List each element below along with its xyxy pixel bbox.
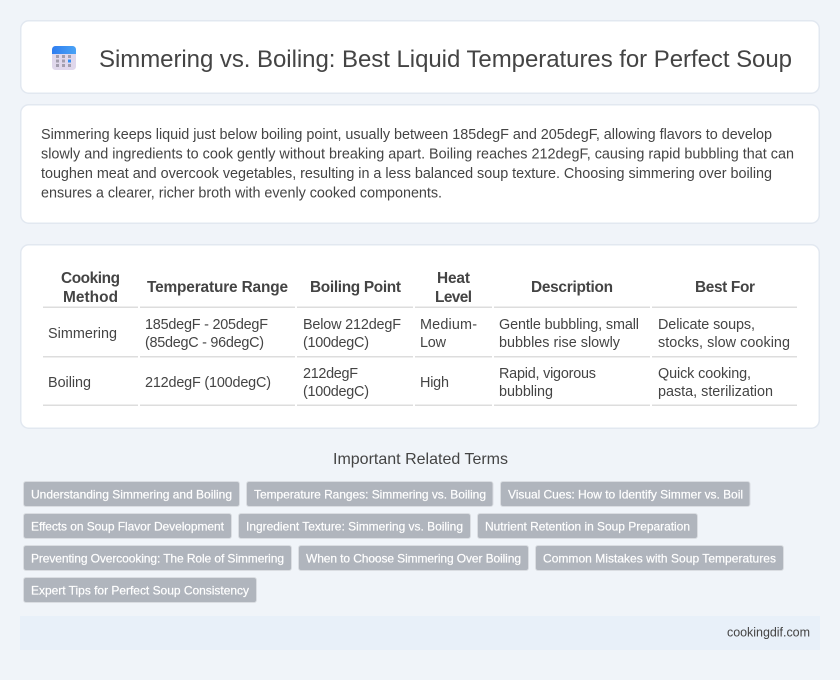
tag: Preventing Overcooking: The Role of Simmering xyxy=(31,551,284,565)
tag: When to Choose Simmering Over Boiling xyxy=(306,551,521,565)
tag: Understanding Simmering and Boiling xyxy=(31,487,232,501)
table row: simmering: Delicate soups, xyxy=(658,317,755,333)
tag xyxy=(24,482,240,506)
tag xyxy=(478,514,698,538)
table header row xyxy=(61,270,755,306)
table header row: Temperature Range xyxy=(147,279,288,296)
tag xyxy=(24,578,256,602)
table header row: Method xyxy=(63,289,118,306)
table row: simmering xyxy=(48,317,790,351)
table row: boiling: (100degC) xyxy=(303,384,369,400)
intro text: Simmering keeps liquid just below boiling point, usually between 185degF and 205degF, allowing flavors to develop xyxy=(41,127,772,143)
tag: Effects on Soup Flavor Development xyxy=(31,519,225,533)
table header row: Boiling Point xyxy=(310,279,401,296)
table row: simmering: Below 212degF xyxy=(303,317,401,333)
tag: Common Mistakes with Soup Temperatures xyxy=(543,551,776,565)
header panel xyxy=(21,21,819,93)
table row: boiling: pasta, sterilization xyxy=(658,384,773,400)
panel: comparison table xyxy=(21,245,819,428)
tag xyxy=(298,546,528,570)
table row: boiling: 212degF xyxy=(303,366,358,382)
table row: simmering: bubbles rise slowly xyxy=(499,335,621,351)
table row: simmering: (85degC - 96degC) xyxy=(145,335,264,351)
table row: simmering: Medium- xyxy=(420,317,477,333)
table row: simmering: Simmering xyxy=(48,326,117,342)
table row: simmering: stocks, slow cooking xyxy=(658,335,790,351)
table row: simmering: Gentle bubbling, small xyxy=(499,317,639,333)
tag: Temperature Ranges: Simmering vs. Boiling xyxy=(254,487,486,501)
table row: boiling xyxy=(48,366,773,400)
table row: boiling: Boiling xyxy=(48,375,91,391)
tag xyxy=(500,482,750,506)
intro text: toughen meat and overcook vegetables, resulting in a less balanced soup texture. Choosing simmering over boiling xyxy=(41,166,772,182)
related terms tags xyxy=(24,482,784,602)
table row: boiling: bubbling xyxy=(499,384,553,400)
table row: simmering: (100degC) xyxy=(303,335,369,351)
footer credit: cookingdif.com xyxy=(727,626,810,640)
table header row: Heat xyxy=(437,270,470,287)
tag: Nutrient Retention in Soup Preparation xyxy=(485,519,690,533)
table header row: Best For xyxy=(695,279,755,296)
tag xyxy=(536,546,784,570)
tag xyxy=(238,514,470,538)
table row: boiling: Quick cooking, xyxy=(658,366,751,382)
icon: calendar xyxy=(52,46,76,70)
intro text: ensures a clearer, richer broth with evenly cooked components. xyxy=(41,186,442,202)
table row: boiling: High xyxy=(420,375,449,391)
tag xyxy=(24,546,292,570)
table row: boiling: Rapid, vigorous xyxy=(499,366,596,382)
table row: simmering: 185degF - 205degF xyxy=(145,317,268,333)
tag: Visual Cues: How to Identify Simmer vs. Boil xyxy=(508,487,743,501)
related terms heading: Important Related Terms xyxy=(333,451,508,468)
intro text xyxy=(41,127,794,202)
table header row: Level xyxy=(435,289,472,306)
panel: intro paragraph xyxy=(21,105,819,223)
table row: boiling: 212degF (100degC) xyxy=(145,375,271,391)
tag xyxy=(246,482,493,506)
tag xyxy=(24,514,232,538)
table row: simmering: Low xyxy=(420,335,447,351)
title: Simmering vs. Boiling: Best Liquid Temperatures for Perfect Soup xyxy=(99,46,792,73)
footer band xyxy=(20,616,820,650)
table header row: Description xyxy=(531,279,613,296)
tag: Expert Tips for Perfect Soup Consistency xyxy=(31,583,249,597)
intro text: slowly and ingredients to cook gently without breaking apart. Boiling reaches 212degF, causing rapid bubbling that can xyxy=(41,146,794,162)
table header row: Cooking xyxy=(61,270,120,287)
tag: Ingredient Texture: Simmering vs. Boiling xyxy=(246,519,463,533)
